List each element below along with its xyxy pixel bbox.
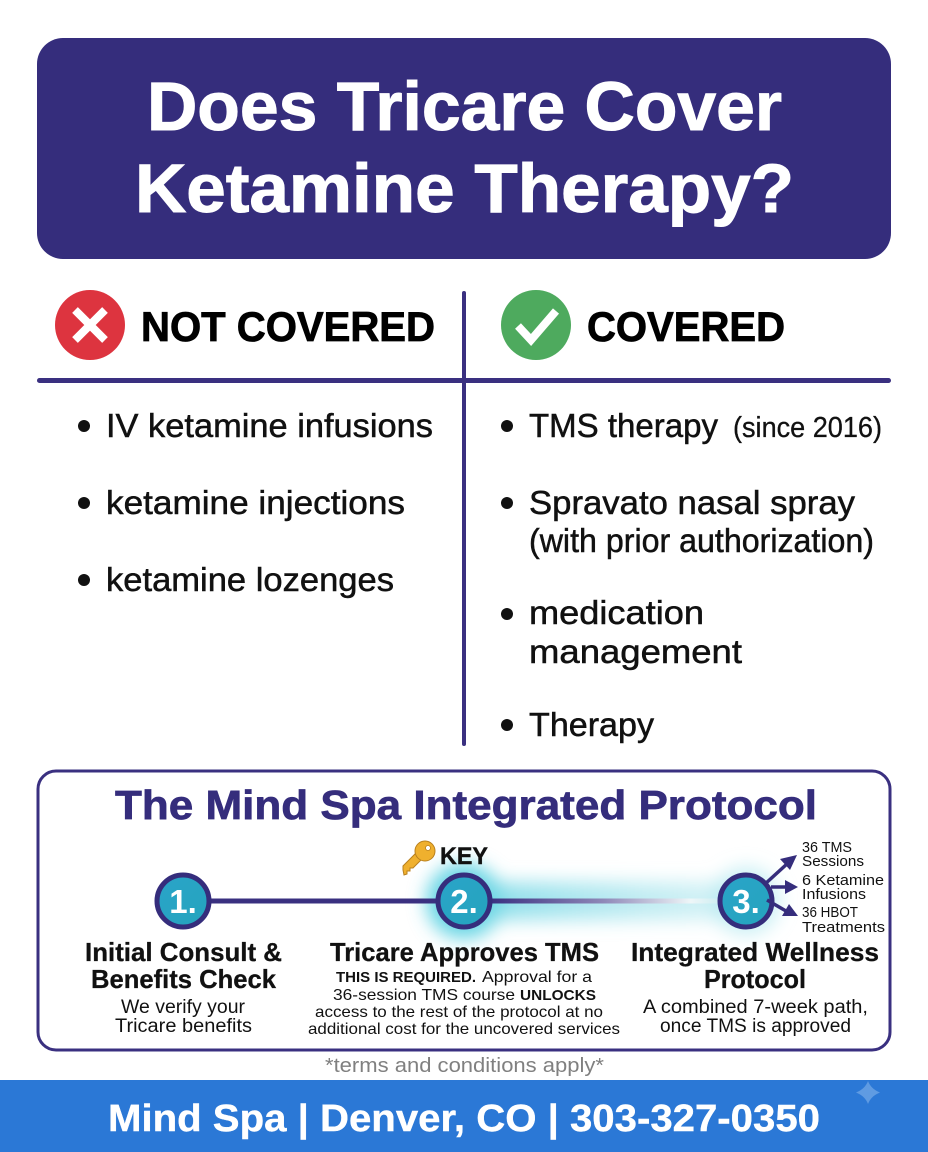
list: not covered items: ketamine lozenges (106, 561, 394, 598)
step 2 text: THIS IS REQUIRED. (336, 969, 476, 986)
list: not covered items (78, 407, 433, 598)
step 3 text: Integrated Wellness (631, 937, 879, 967)
heading: not covered: NOT COVERED (141, 303, 435, 350)
icon: key (403, 841, 435, 875)
protocol heading: The Mind Spa Integrated Protocol (115, 782, 817, 828)
outcomes list (802, 839, 885, 936)
list: covered items: management (529, 633, 742, 670)
step 3 text: once TMS is approved (660, 1016, 851, 1037)
comparison dividers (37, 291, 891, 746)
list: covered items (501, 407, 882, 743)
list: not covered items: ketamine injections (106, 484, 405, 521)
step 1 text: Initial Consult & (85, 937, 282, 967)
step 2 text (308, 937, 620, 1038)
heading: covered (501, 290, 785, 360)
title banner: Does Tricare Cover (147, 68, 782, 145)
step 3 circle: 3. (732, 883, 760, 920)
glow behind step 2 and connector (426, 863, 780, 939)
connector: step 1 to 2 (208, 898, 440, 904)
step 1 text: We verify your (121, 997, 246, 1018)
step 1 circle: 1. (169, 883, 197, 920)
outcomes list: 36 HBOT (802, 904, 858, 921)
list: covered items: (since 2016) (733, 412, 882, 444)
outcomes list: 6 Ketamine (802, 872, 884, 889)
step 2 circle: 2. (450, 883, 478, 920)
outcomes list: Infusions (802, 886, 866, 903)
connector: step 2 to 3 (488, 898, 720, 904)
step 3 text (631, 937, 879, 1037)
step 2 text: additional cost for the uncovered services (308, 1021, 620, 1038)
step 2 text: access to the rest of the protocol at no (315, 1004, 603, 1021)
step 3 circle (720, 875, 772, 927)
list: not covered items: IV ketamine infusions (106, 407, 433, 444)
heading: not covered (55, 290, 435, 360)
icon: red cross (55, 290, 125, 360)
step 1 circle (157, 875, 209, 927)
step 3 text: A combined 7-week path, (643, 997, 868, 1018)
list: covered items: Spravato nasal spray (529, 484, 856, 521)
step 2 text: Approval for a (482, 969, 592, 986)
outcomes list: Treatments (802, 919, 885, 936)
footer contact text: Mind Spa | Denver, CO | 303-327-0350 (108, 1098, 820, 1140)
list: covered items: Therapy (529, 706, 655, 743)
step 1 text: Tricare benefits (115, 1016, 252, 1037)
outcomes list: 36 TMS (802, 839, 852, 856)
arrows: step 3 outcomes (765, 855, 798, 916)
footer bar (0, 1080, 928, 1152)
step 2 text: UNLOCKS (520, 987, 596, 1004)
step 1 text (85, 937, 282, 1037)
panel: integrated protocol (38, 771, 890, 1050)
title banner (37, 38, 891, 259)
step 2 text: 36-session TMS course (333, 987, 515, 1004)
title banner: Ketamine Therapy? (135, 150, 794, 227)
icon: sparkle (856, 1081, 880, 1104)
terms note: *terms and conditions apply* (325, 1055, 604, 1077)
list: covered items: TMS therapy (529, 407, 718, 444)
step 3 text: Protocol (704, 964, 806, 994)
list: covered items: (with prior authorization) (529, 522, 874, 559)
outcomes list: Sessions (802, 853, 864, 870)
step 1 text: Benefits Check (91, 964, 277, 994)
heading: covered: COVERED (587, 303, 785, 350)
icon: green check (501, 290, 571, 360)
key label: KEY (440, 843, 488, 870)
list: covered items: medication (529, 594, 704, 631)
step 2 circle (438, 875, 490, 927)
step 2 text: Tricare Approves TMS (330, 937, 599, 967)
